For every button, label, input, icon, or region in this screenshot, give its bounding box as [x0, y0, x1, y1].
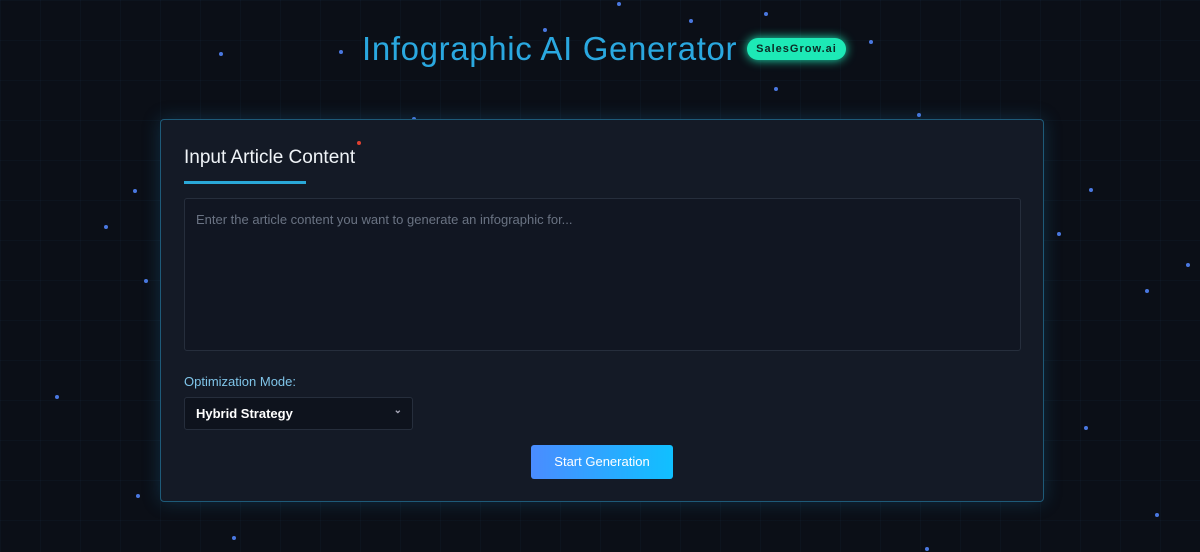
heading: Input Article Content — [184, 147, 355, 168]
underline — [184, 181, 306, 184]
title: Infographic AI Generator — [362, 30, 737, 67]
red dot — [357, 141, 361, 145]
panel: input — [160, 119, 1044, 502]
button — [531, 445, 673, 479]
button: Start Generation — [554, 454, 650, 469]
badge — [747, 38, 846, 60]
select: ⌄ — [394, 405, 402, 416]
badge: SalesGrow.ai — [756, 43, 837, 55]
label: Optimization Mode: — [184, 374, 296, 389]
textarea — [184, 198, 1021, 351]
textarea: Enter the article content you want to generate an infographic for... — [196, 212, 573, 227]
select: Hybrid Strategy — [196, 406, 293, 421]
select — [184, 397, 413, 430]
